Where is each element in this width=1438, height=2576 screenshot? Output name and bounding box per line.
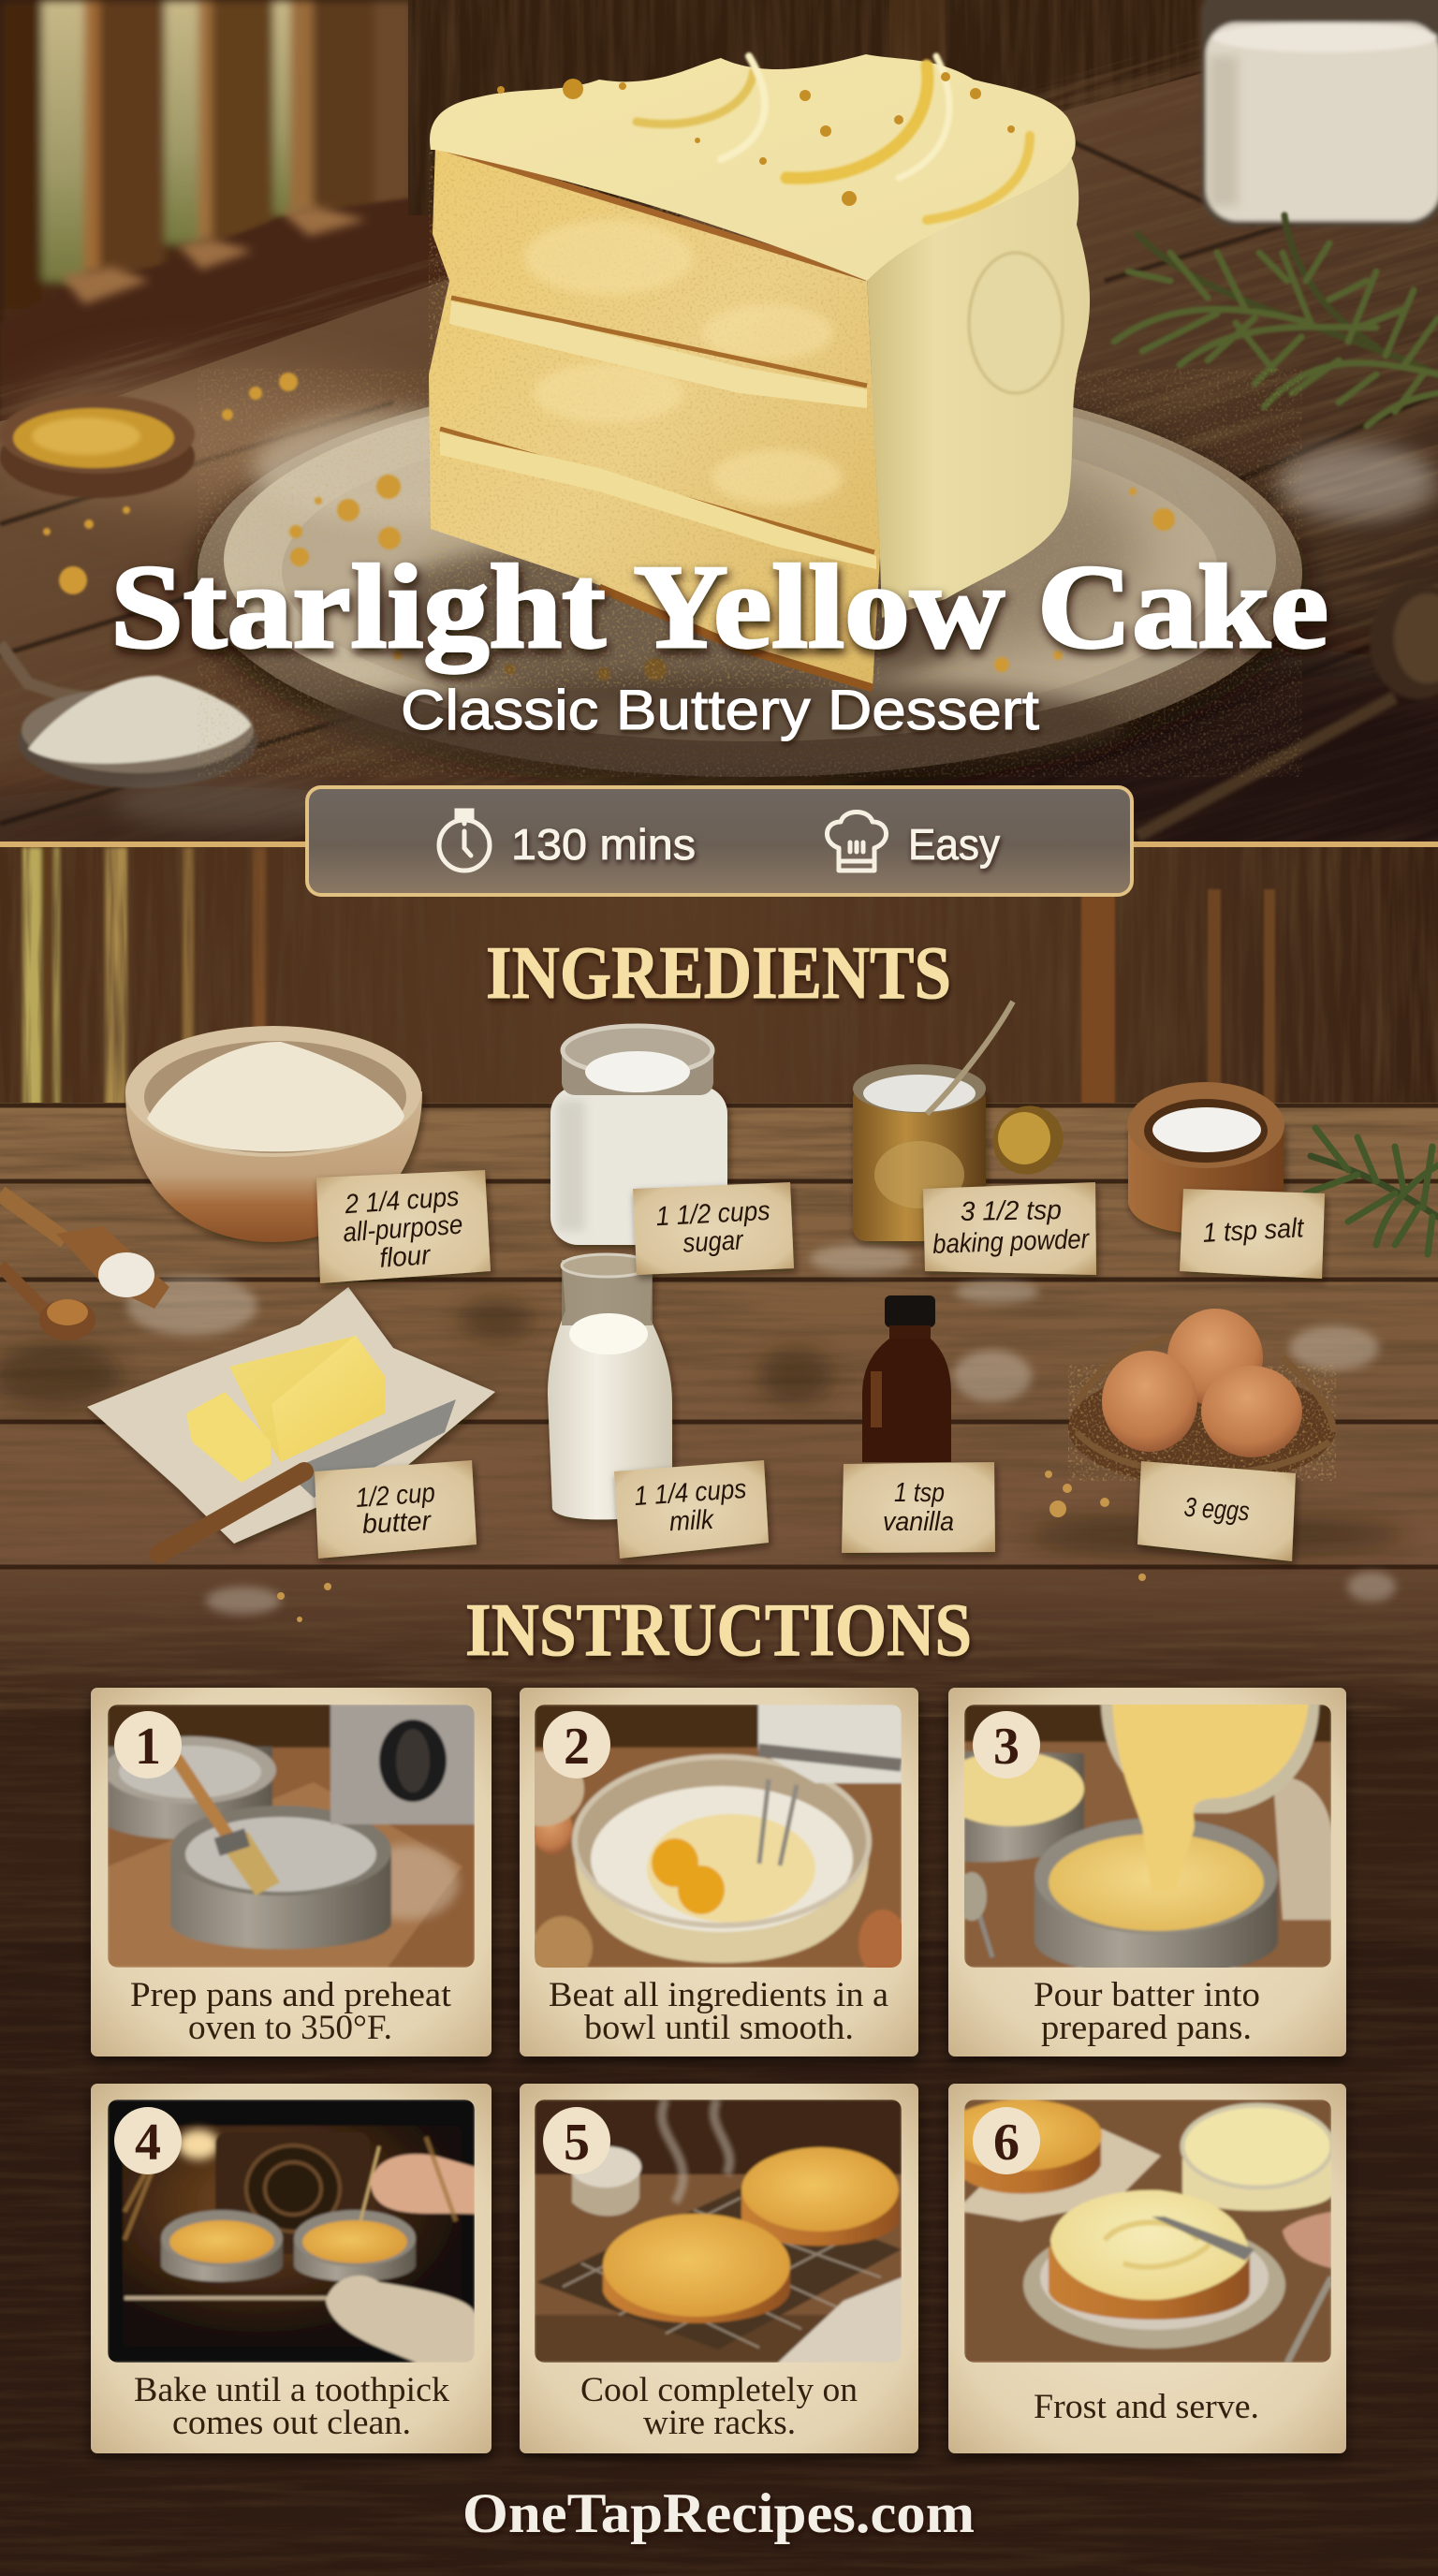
number badge 6: 6	[993, 2114, 1020, 2172]
label: vanilla: vanilla	[883, 1507, 954, 1537]
label: eggs	[1137, 1461, 1296, 1561]
crumb texture	[429, 146, 880, 688]
wall grain	[0, 847, 1438, 1109]
table warm light	[9, 374, 440, 505]
number badge 6	[973, 2107, 1040, 2174]
flour dusting right	[1278, 445, 1437, 520]
label: flour: flour	[378, 1240, 433, 1274]
window sill	[0, 192, 449, 426]
cut face of cake	[429, 146, 880, 688]
ingredients heading: INGREDIENTS	[486, 932, 951, 1015]
cake slice	[365, 54, 1090, 702]
wall base	[0, 847, 1438, 1109]
label: milk: 1 1/4 cups	[633, 1474, 747, 1512]
table dark corner	[824, 646, 1438, 889]
card paper	[948, 1688, 1346, 2056]
step 3 text	[1034, 1976, 1260, 2047]
step 2 text	[549, 1976, 888, 2047]
step 1 text: Prep pans and preheat	[130, 1976, 452, 2014]
light crumb patches	[524, 220, 843, 505]
step 1 photo	[104, 1705, 475, 1968]
card paper	[520, 1688, 918, 2056]
label: flour: 2 1/4 cups	[343, 1182, 460, 1220]
label: vanilla	[842, 1462, 995, 1553]
hero photo: cake on rustic table	[0, 0, 1438, 847]
icon: stopwatch	[439, 811, 490, 871]
crumbs	[277, 1471, 1146, 1622]
window with light strips and slats	[0, 0, 408, 359]
number badge 4	[114, 2107, 182, 2174]
ingredient: flour bowl	[125, 1026, 422, 1242]
step 4 card	[91, 2084, 492, 2453]
ingredient: wooden scoops	[0, 1193, 169, 1340]
step 2 text: bowl until smooth.	[584, 2009, 854, 2047]
step 5 card	[520, 2084, 918, 2453]
lower wall boards	[0, 1717, 1438, 2576]
label: flour: all-purpose	[342, 1210, 463, 1248]
wall planks top right	[408, 0, 1213, 215]
table plank seams	[0, 131, 1438, 824]
label: sugar	[633, 1182, 794, 1275]
step 5 photo	[535, 2100, 902, 2363]
label: baking powder: baking powder	[932, 1224, 1091, 1260]
label: butter: 1/2 cup	[355, 1478, 436, 1514]
ingredient: eggs in nest	[1068, 1309, 1336, 1486]
flour dust patches	[126, 1244, 1396, 1615]
top crust	[440, 147, 867, 278]
instructions heading: INSTRUCTIONS	[465, 1589, 972, 1672]
label: salt: 1 tsp salt	[1202, 1213, 1306, 1249]
number badge 3	[973, 1711, 1040, 1778]
table dark left foot	[0, 786, 487, 880]
flour dust left	[112, 781, 356, 829]
step 2 card	[500, 1688, 918, 2056]
left light slats	[22, 847, 266, 1109]
ingredient: butter on parchment with knife	[87, 1287, 495, 1554]
step 4 text: comes out clean.	[172, 2404, 411, 2442]
gold sugar bowl	[0, 395, 195, 498]
plank seams	[0, 1105, 1438, 1567]
number badge 2	[543, 1711, 610, 1778]
label: baking powder: 3 1/2 tsp	[961, 1195, 1062, 1227]
card paper	[520, 2084, 918, 2453]
step 3 photo	[938, 1700, 1331, 1975]
step 3 card	[938, 1688, 1346, 2056]
table grain	[0, 0, 1438, 1438]
step 4 text	[134, 2371, 450, 2442]
wall post right	[1081, 847, 1275, 1109]
ingredient: milk bottle	[548, 1254, 672, 1519]
ingredients back wall	[0, 847, 1438, 1109]
ingredients table	[0, 1103, 1438, 1717]
pill body	[307, 787, 1132, 895]
ingredient: salt cup	[1127, 1082, 1284, 1234]
step 5 text	[580, 2371, 858, 2442]
number badge 1: 1	[135, 1718, 161, 1776]
card paper	[948, 2084, 1346, 2453]
flour spoon	[0, 644, 257, 788]
time text: 130 mins	[511, 820, 696, 869]
rosemary sprig right	[1306, 1128, 1438, 1254]
plate	[190, 369, 1310, 793]
step 6 text: Frost and serve.	[1034, 2388, 1259, 2426]
cake shadow	[365, 534, 983, 702]
first filling layer	[451, 298, 867, 386]
label: sugar: 1 1/2 cups	[655, 1196, 770, 1232]
label: milk: milk	[668, 1505, 715, 1537]
number badge 1	[114, 1711, 182, 1778]
step 3 text: prepared pans.	[1041, 2009, 1252, 2047]
frosted side	[867, 140, 1090, 618]
step 6 card	[943, 2084, 1346, 2453]
step 2 text: Beat all ingredients in a	[549, 1976, 888, 2014]
step 3 text: Pour batter into	[1034, 1976, 1260, 2014]
step 1 text	[130, 1976, 452, 2047]
step 1 text: oven to 350°F.	[188, 2009, 392, 2047]
ingredient: vanilla bottle	[862, 1295, 951, 1462]
step 5 text: wire racks.	[643, 2404, 796, 2442]
label: vanilla: 1 tsp	[894, 1478, 945, 1508]
label: flour	[316, 1170, 491, 1283]
gold line left	[0, 842, 309, 848]
number badge 3: 3	[993, 1718, 1020, 1776]
step 6 photo	[943, 2100, 1332, 2363]
label: butter: butter	[361, 1506, 433, 1540]
label: butter	[315, 1460, 477, 1559]
card paper	[91, 2084, 492, 2453]
frosting swirls	[637, 56, 1030, 220]
crumbs on plate and table	[43, 373, 1175, 681]
hero back wall	[0, 0, 1438, 847]
label: milk	[614, 1460, 769, 1559]
table top	[0, 0, 1438, 847]
label: baking powder	[923, 1182, 1096, 1275]
main title: Starlight Yellow Cake	[110, 540, 1328, 673]
ingredient: sugar jar	[550, 1026, 727, 1245]
step 5 text: Cool completely on	[580, 2371, 858, 2409]
step 4 photo	[108, 2100, 475, 2363]
gold line right	[1129, 842, 1438, 848]
subtitle: Classic Buttery Dessert	[401, 679, 1039, 741]
step 1 card	[91, 1688, 492, 2056]
website footer: OneTapRecipes.com	[462, 2482, 975, 2544]
ingredient: baking powder tin	[853, 1002, 1076, 1241]
number badge 2: 2	[564, 1718, 590, 1776]
number badge 5: 5	[564, 2114, 590, 2172]
number badge 5	[543, 2107, 610, 2174]
card paper	[91, 1688, 492, 2056]
milk jar	[1201, 0, 1438, 227]
label: eggs: 3 eggs	[1183, 1493, 1251, 1527]
large serving spoon	[1137, 583, 1438, 836]
step 4 text: Bake until a toothpick	[134, 2371, 450, 2409]
second filling layer	[440, 429, 874, 552]
table planks	[0, 1103, 1438, 1567]
sill lit patches	[61, 206, 367, 304]
dark knots	[0, 1299, 1404, 1556]
rosemary sprig	[1114, 215, 1438, 426]
difficulty text: Easy	[908, 820, 1000, 869]
table grain	[0, 1103, 1438, 1567]
label: sugar: sugar	[682, 1225, 745, 1259]
gold flecks	[497, 72, 1015, 206]
icon: chef hat	[827, 812, 887, 871]
time and difficulty pill	[307, 787, 1132, 895]
step 2 photo	[500, 1705, 907, 1980]
cake bottom crust	[599, 588, 873, 688]
number badge 4: 4	[135, 2114, 161, 2172]
lower table grain	[0, 1567, 1438, 1717]
lower table plank	[0, 1567, 1438, 1717]
label: salt	[1180, 1189, 1325, 1279]
frosted top	[430, 54, 1076, 281]
side swirl	[969, 253, 1063, 393]
